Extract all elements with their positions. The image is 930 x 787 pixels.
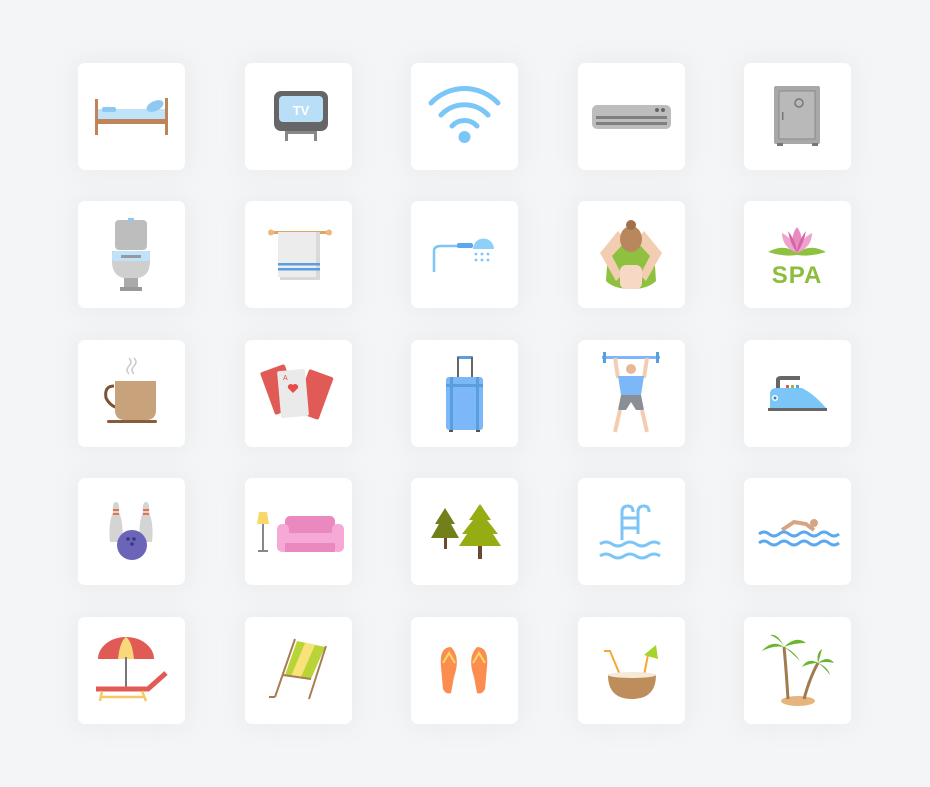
card: bowling [70,470,193,593]
card: cards [237,332,360,455]
card: cards: A [283,375,288,382]
card: towel [237,193,360,316]
card: palm trees [736,609,859,732]
card: coconut drink [570,609,693,732]
card: swimming [736,470,859,593]
card: sofa lamp [237,470,360,593]
card: spa [736,193,859,316]
card: flip flops [403,609,526,732]
card: suitcase [403,332,526,455]
card: toilet [70,193,193,316]
card: bed [70,55,193,178]
card: iron [736,332,859,455]
card: air conditioner [570,55,693,178]
card: safe [736,55,859,178]
card: massage [570,193,693,316]
card: umbrella lounger [70,609,193,732]
card: weightlifting [570,332,693,455]
card: tv [237,55,360,178]
card: trees [403,470,526,593]
card: wifi [403,55,526,178]
card: coffee [70,332,193,455]
card: deck chair [237,609,360,732]
card: tv: TV [293,103,310,118]
card: shower [403,193,526,316]
card: spa: SPA [772,262,822,289]
card: pool [570,470,693,593]
